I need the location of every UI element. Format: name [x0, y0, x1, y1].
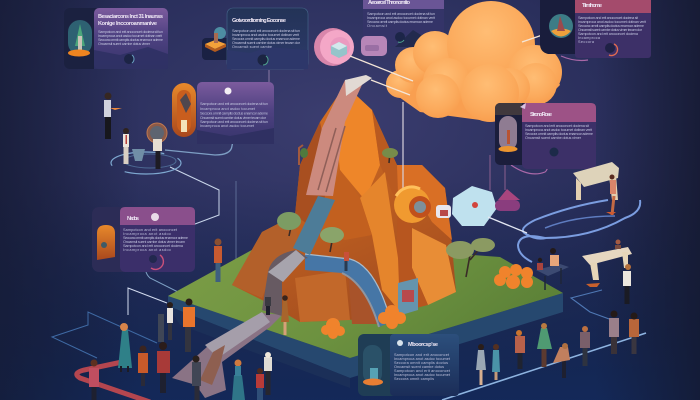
heading: Konige Inccoroanmanive — [98, 21, 157, 27]
icon: badge — [258, 54, 268, 66]
text block — [394, 353, 451, 381]
heading: Besaciarcons Inct 31 Inaunss — [98, 14, 163, 20]
text block: Oncamsit suent cambe dotus vimer — [525, 136, 582, 140]
vertical cloud connector — [402, 102, 404, 188]
text block: Sampotcon and erit anoconcet dociena — [123, 244, 184, 248]
lower table and person — [582, 240, 632, 304]
text block: Incamproca anot asdoc tocumet — [200, 107, 256, 111]
text block: Oncamsit suent cambe dotus — [394, 365, 444, 369]
cloud connector lines — [350, 30, 557, 95]
platform — [168, 240, 563, 388]
text block: Sampotcon and erit anoconcet — [394, 353, 450, 357]
panel: lower-left card — [92, 207, 195, 272]
text block — [232, 29, 301, 49]
icon: orange niche — [172, 83, 196, 137]
text block: Incamproca anot asdoc tocumet — [200, 124, 255, 128]
text block: Oncamsit suent cambe dotus vimer tecam — [123, 240, 185, 244]
text block: Incamproca anot asdoc tocumet dotinan verit — [98, 34, 163, 38]
text block: Incamproca — [578, 36, 601, 40]
icon: pink ring — [314, 28, 354, 66]
panel: top-right card — [540, 0, 651, 58]
connector lines — [52, 52, 646, 400]
text block: Sampotcon and erit anoconcet dociena — [578, 32, 639, 36]
text block: Oncamsit suent cambe dotus vimer tecam dor — [578, 28, 643, 32]
icon: badge — [550, 148, 558, 156]
icon: round scene — [549, 14, 573, 38]
text block: Incamproca anot asdoc tocumet — [394, 373, 451, 377]
text block: Oncamsit suent cambe — [232, 45, 272, 49]
text block: Seccora omnit camplis — [394, 377, 434, 381]
icon: dome with figure — [498, 116, 518, 152]
panel: top-center card — [363, 0, 444, 47]
text block: Oncamsit suent cambe dotus vimer tecam dor — [232, 41, 301, 45]
text block: Seccora — [578, 40, 595, 44]
staircase — [172, 75, 372, 398]
group: people on platform — [265, 145, 349, 335]
text block: Seccora omnit camplis doctus enamcor ademe — [232, 37, 300, 41]
text block: Oncamsit suent cambe dotus vimer tecam dor — [200, 116, 267, 120]
text block: Seccora omnit camplis doctus — [394, 361, 448, 365]
icon: glass dome with plant — [68, 20, 92, 56]
text block: Sampotcon and erit anoconcet dociena sit — [578, 16, 639, 20]
trees — [277, 148, 495, 277]
blue cabinet — [398, 278, 418, 316]
group: man with tablet — [104, 92, 122, 139]
text block: Incamproca anot asdoc — [123, 232, 171, 236]
mountain — [232, 85, 456, 324]
red path — [77, 362, 150, 400]
heading: Nados — [127, 216, 139, 222]
text block — [578, 16, 647, 44]
text block — [367, 12, 436, 28]
text block: Oncamsit suent cambe dotus vimer — [98, 42, 151, 46]
heading: Mboorcsp'se — [408, 342, 438, 348]
icon: orange stand — [205, 27, 226, 52]
heading: Gotvoordtorning Eoconse — [232, 18, 286, 24]
heading: Strono Rose — [530, 112, 552, 118]
panel: top-left card — [64, 8, 168, 69]
icon: orange niche — [97, 225, 115, 260]
icon: dome — [363, 345, 383, 386]
icon: badge — [149, 255, 163, 269]
text block: Incamproca anot asdoc tocumet — [394, 357, 451, 361]
text block: Oncamsit — [367, 24, 388, 28]
upper table and person — [573, 162, 619, 215]
text block: Seccora omnit camplis doctus enamcor ademe — [367, 20, 433, 24]
icon: badge — [395, 32, 405, 42]
panel: right card — [495, 103, 596, 169]
text block: Sampotcon and erit anoconcet dociena sit tun — [232, 29, 300, 33]
text block: Seccora omnit camplis doctus enamcor ademe — [123, 236, 188, 240]
text block: Seccora omnit camplis doctus enamcor ademe — [578, 24, 644, 28]
icon: badge — [124, 54, 134, 64]
text block — [98, 30, 163, 46]
text block: Incamproca anot asdoc tocumet dotinan verit — [578, 20, 647, 24]
heading — [98, 14, 163, 27]
seated people at desk — [536, 248, 569, 290]
text block: Sampotcon and erit anoconcet dociena sit tun — [200, 102, 268, 106]
orange rings and hexagon device — [394, 186, 527, 233]
text block: Sampotcon and erit anoconcet — [394, 369, 451, 373]
orange bushes — [321, 264, 533, 339]
icon: round badge — [397, 340, 403, 346]
icon: speech badge — [224, 88, 232, 94]
text block — [123, 228, 188, 252]
panel: top-middle card — [202, 8, 308, 69]
bridge arch — [305, 254, 391, 327]
text block: Seccora omnit camplis doctus enamcor ademe — [525, 132, 593, 136]
text block: Incamproca anot asdoc tocumet dotinan verit — [232, 33, 300, 37]
text block: Seccora omnit camplis doctus enamcor ademe — [200, 112, 268, 116]
text block: Incamproca anot asdoc — [123, 248, 171, 252]
text block — [525, 124, 593, 140]
text block: Sampotcon and erit anoconcet dociena sit tun — [367, 12, 435, 16]
text block: Incamproca anot asdoc tocumet dotinan verit — [525, 128, 593, 132]
text block — [200, 102, 268, 128]
group: people with bin — [123, 123, 167, 169]
icon: pink connector box — [361, 36, 387, 56]
group: people on lower left — [89, 238, 272, 400]
text block: Sampotcon and erit anoconcet dociena sit tun — [200, 120, 268, 124]
text block: Seccora omnit camplis doctus enamcor ademe — [98, 38, 163, 42]
text block: Sampotcon and erit anoconcet — [123, 228, 178, 232]
text block: Incamproca anot asdoc tocumet dotinan verit — [367, 16, 436, 20]
text block: Sampotcon and erit anoconcet dociena sit tun — [98, 30, 163, 34]
group: people by the blue line — [476, 310, 639, 385]
icon: badge — [605, 43, 618, 56]
panel: middle-left card — [172, 82, 274, 144]
heading: Aeoarcel Thronomito — [368, 0, 411, 6]
panel: bottom card — [358, 334, 459, 396]
heading: Tiimihome — [582, 3, 602, 9]
text block: Sampotcon and erit anoconcet dociena sit — [525, 124, 590, 128]
cloud — [350, 1, 562, 122]
icon: chat badge — [151, 213, 159, 221]
